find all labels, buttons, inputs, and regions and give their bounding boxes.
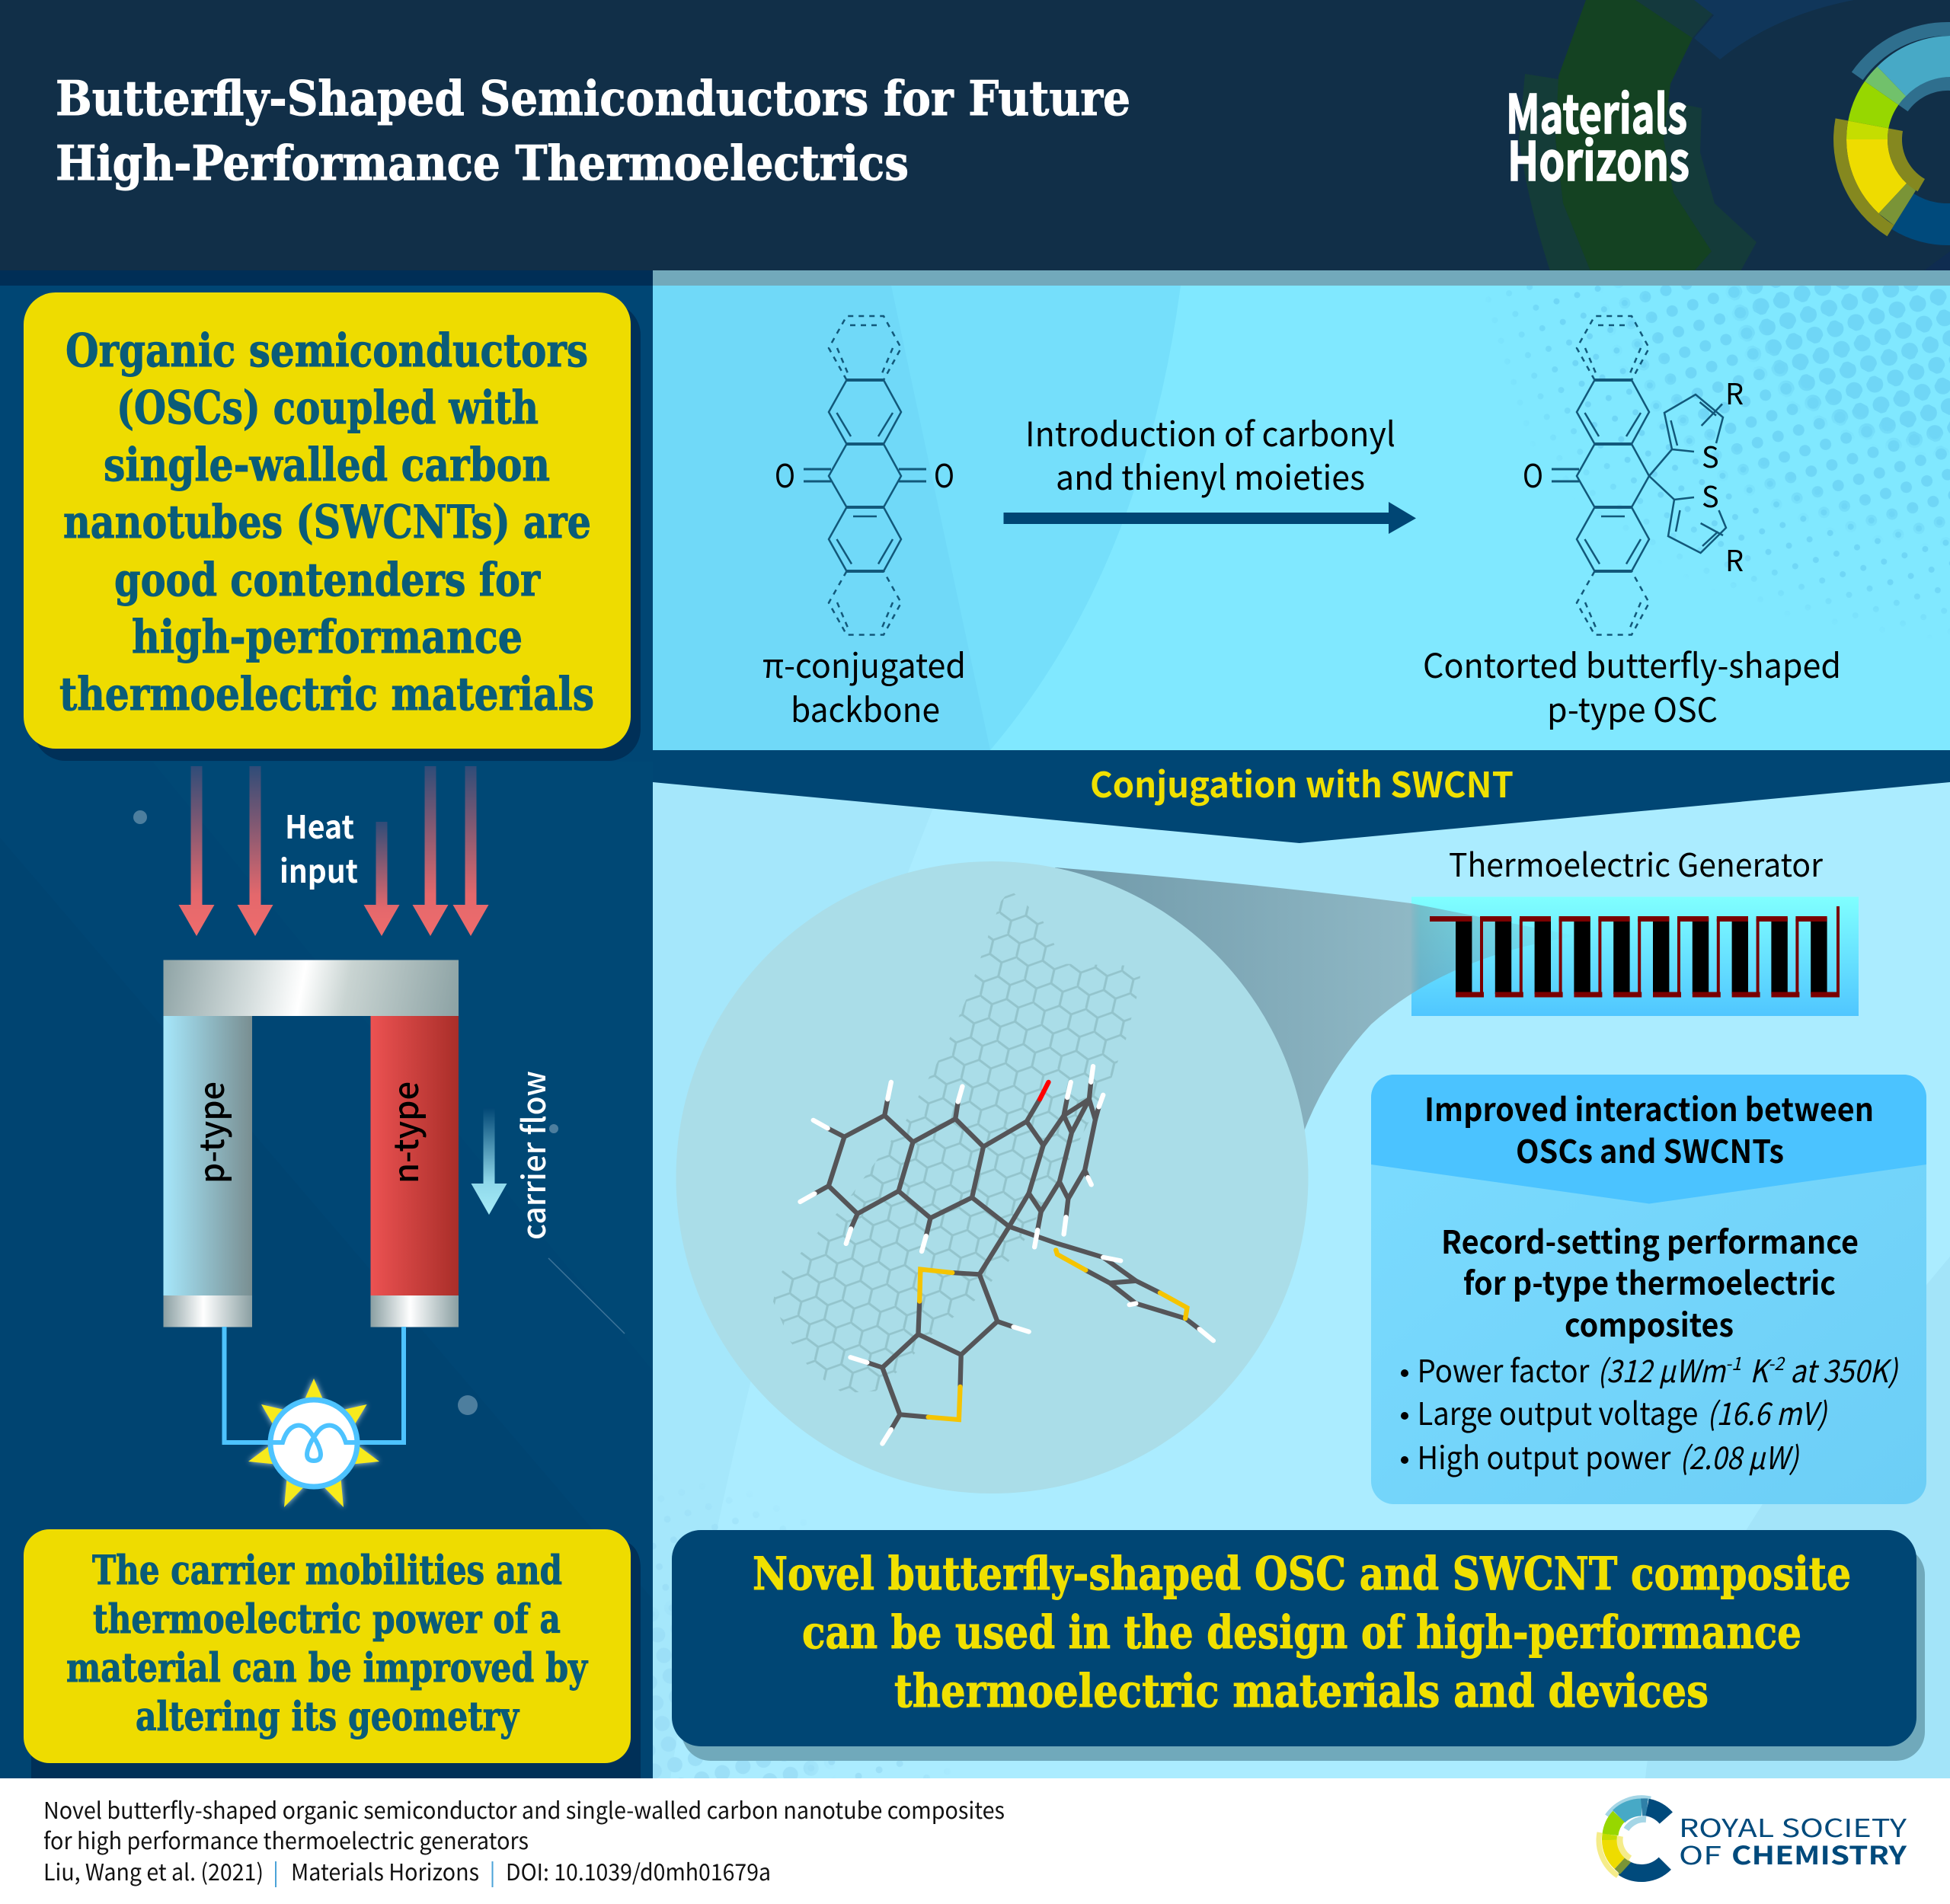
ghost logo decoration [1519, 0, 1950, 271]
label: contorted butterfly-shaped OSC: p-type OSC [1547, 683, 1718, 732]
arrow: carrier flow: carrier flow [509, 1071, 555, 1240]
label: heat input [280, 802, 358, 893]
hydrogen bonds [800, 1066, 1213, 1443]
logo: Royal Society of Chemistry [1599, 1798, 1907, 1876]
banner: conjugation with SWCNT [653, 750, 1950, 843]
label: contorted butterfly-shaped OSC: Contorted butterfly-shaped [1423, 639, 1841, 688]
callout: organic semiconductors yellow box: Organic semiconductors [66, 324, 588, 378]
callout: organic semiconductors yellow box: high-performance [132, 611, 523, 664]
callout: carrier mobilities yellow box: material can be improved by [66, 1645, 588, 1692]
arrow: reaction [1004, 502, 1416, 534]
header band [0, 0, 1950, 271]
callout: organic semiconductors yellow box: single-walled carbon [104, 439, 550, 492]
list: performance values: at 350K) [1790, 1346, 1899, 1391]
p-type leg [163, 1016, 252, 1327]
n-type leg: n-type [379, 1081, 428, 1184]
list: performance values: (312 µWm [1597, 1346, 1727, 1391]
panel: top right molecular design [653, 270, 1950, 750]
list: performance values: Power factor [1417, 1346, 1590, 1391]
heading: record-setting performance: Record-setting performance [1441, 1217, 1859, 1263]
callout: organic semiconductors yellow box: thermoelectric materials [59, 668, 594, 721]
heading: record-setting performance: for p-type thermoelectric [1463, 1258, 1836, 1305]
journal name: Materials Horizons [1506, 72, 1689, 196]
nanotube [773, 893, 1140, 1392]
heading: improved interaction: Improved interaction between [1424, 1085, 1874, 1131]
panel: lower right SWCNT composite [653, 750, 1950, 1778]
label: reaction step [1025, 407, 1395, 500]
list: performance values: High output power [1417, 1433, 1671, 1478]
list: performance values: (2.08 µW) [1680, 1433, 1800, 1478]
molecule: pi-conjugated backbone [775, 316, 954, 635]
list: performance values: (16.6 mV) [1707, 1388, 1828, 1434]
list: performance values: Large output voltage [1417, 1388, 1699, 1434]
label: reaction step: and thienyl moieties [1056, 451, 1365, 500]
footer: citation [43, 1792, 1005, 1887]
arrows: heat input [178, 766, 489, 936]
logo: Royal Society of Chemistry: OF [1679, 1835, 1721, 1872]
callout: carrier mobilities yellow box: The carrier mobilities and [92, 1548, 562, 1594]
diagram: generator legs [1430, 906, 1840, 997]
banner: conjugation with SWCNT: Conjugation with SWCNT [1090, 758, 1514, 808]
heading: improved interaction: OSCs and SWCNTs [1516, 1126, 1784, 1173]
list: performance values: -2 [1768, 1349, 1786, 1375]
list: performance values: -1 [1725, 1349, 1741, 1375]
callout: conclusion [672, 1530, 1925, 1761]
callout: carrier mobilities yellow box [24, 1529, 641, 1778]
molecule: pi-conjugated backbone: O [775, 451, 795, 497]
callout: organic semiconductors yellow box: nanotubes (SWCNTs) are [63, 496, 591, 549]
molecule: OSC on carbon nanotube [758, 880, 1213, 1443]
journal name: Materials Horizons: Materials [1506, 72, 1687, 149]
title: High-Performance Thermoelectrics [56, 135, 909, 191]
icon: light bulb circuit [224, 1327, 404, 1507]
callout: organic semiconductors yellow box: (OSCs) coupled with [117, 382, 539, 435]
sulfur [919, 1250, 1187, 1420]
generator background [1411, 897, 1859, 1016]
oxygen [1040, 1082, 1049, 1099]
arrow: carrier flow [471, 1071, 555, 1240]
molecule: butterfly-shaped OSC: R [1725, 538, 1744, 580]
heading: record-setting performance [1441, 1217, 1859, 1347]
journal name: Materials Horizons: Horizons [1507, 120, 1689, 196]
molecule: butterfly-shaped OSC: R [1725, 371, 1744, 413]
label: pi-conjugated backbone: backbone [791, 683, 940, 732]
p-type leg: p-type [185, 1081, 234, 1184]
footer: citation: Novel butterfly-shaped organic semiconductor and single-walled carbon nanotube composites [43, 1792, 1005, 1826]
molecule: butterfly-shaped OSC [1523, 316, 1744, 635]
heading: improved interaction [1424, 1085, 1874, 1173]
diagram: thermoelectric couple [163, 960, 459, 1327]
label: thermoelectric generator: Thermoelectric Generator [1449, 840, 1824, 887]
list: performance values [1401, 1346, 1899, 1478]
label: pi-conjugated backbone: π-conjugated [762, 639, 966, 688]
molecule: pi-conjugated backbone: O [934, 451, 954, 497]
logo: Royal Society of Chemistry: CHEMISTRY [1731, 1835, 1907, 1872]
callout: carrier mobilities yellow box: thermoelectric power of a [93, 1596, 561, 1643]
metal top connector [163, 960, 459, 1016]
callout: organic semiconductors yellow box [24, 292, 641, 761]
panel: improved interaction [1371, 1075, 1926, 1504]
label: heat input: input [280, 846, 358, 893]
n-type leg [370, 1016, 459, 1327]
label: heat input: Heat [285, 802, 354, 848]
molecule: butterfly-shaped OSC: S [1702, 434, 1719, 476]
icon: header logo rings [1833, 22, 1950, 245]
circle: molecular view [676, 861, 1309, 1493]
molecule: butterfly-shaped OSC: O [1523, 451, 1543, 497]
list: performance values: K [1750, 1346, 1773, 1391]
title: Butterfly-Shaped Semiconductors for Future [56, 70, 1130, 126]
panel: left dark blue column [0, 270, 653, 1778]
title [56, 70, 1130, 191]
footer: citation: Liu, Wang et al. (2021) [43, 1854, 264, 1887]
callout: carrier mobilities yellow box: altering its geometry [136, 1694, 519, 1740]
zoom wedge from circle to generator [1055, 867, 1577, 1158]
heading: record-setting performance: composites [1565, 1300, 1734, 1347]
footer: citation: for high performance thermoelectric generators [43, 1823, 529, 1856]
label: contorted butterfly-shaped OSC [1423, 639, 1841, 732]
carbon bonds [814, 1082, 1200, 1430]
label: pi-conjugated backbone [762, 639, 966, 732]
logo: Royal Society of Chemistry: ROYAL SOCIETY [1679, 1808, 1907, 1845]
callout: organic semiconductors yellow box: good contenders for [114, 554, 541, 607]
label: reaction step: Introduction of carbonyl [1025, 407, 1395, 456]
footer: citation: Materials Horizons [291, 1854, 479, 1887]
molecule: butterfly-shaped OSC: S [1702, 474, 1719, 516]
footer: citation: DOI: 10.1039/d0mh01679a [506, 1854, 771, 1887]
callout: conclusion: thermoelectric materials and devices [894, 1665, 1709, 1718]
